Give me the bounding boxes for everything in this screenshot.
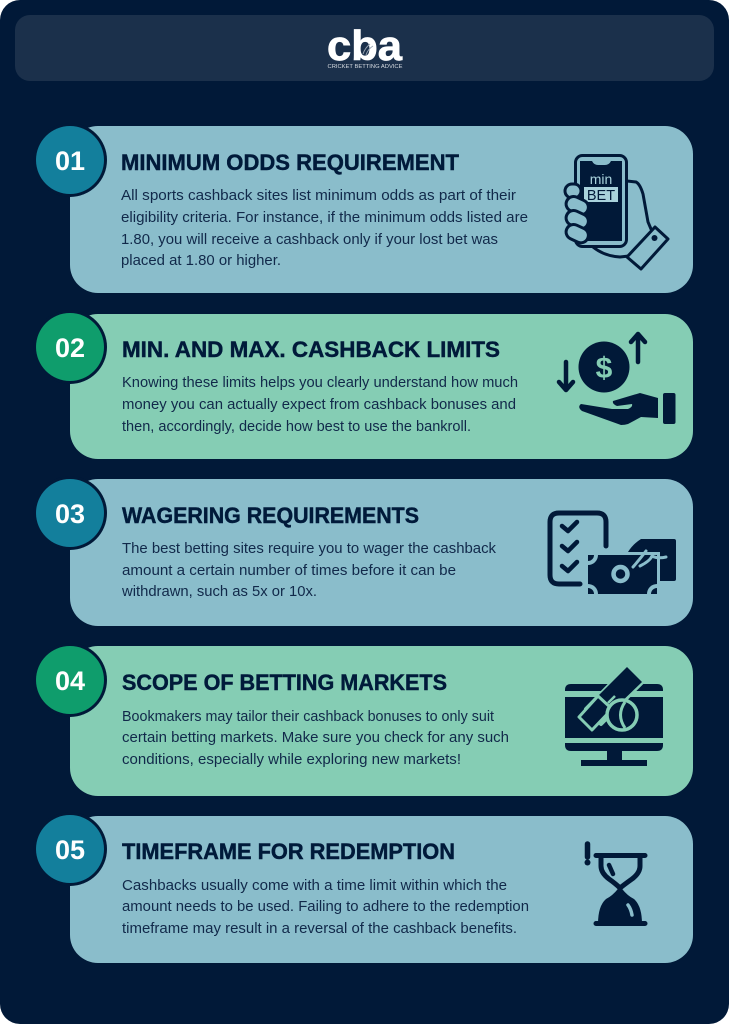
body text 02: then, accordingly, decide how best to use the bankroll. bbox=[122, 419, 471, 435]
panel 5: timeframe for redemption bbox=[33, 812, 693, 963]
number badge 01 bbox=[33, 123, 107, 197]
body text 03 bbox=[121, 541, 497, 600]
body text 05: timeframe may result in a reversal of the cashback benefits. bbox=[122, 921, 517, 937]
logo: cba: cba bbox=[327, 22, 403, 69]
number badge 05: 05 bbox=[55, 835, 85, 865]
icon: hand with coin and arrows bbox=[559, 334, 676, 425]
number badge 03: 03 bbox=[55, 499, 85, 529]
icon: hourglass with exclamation mark bbox=[584, 844, 645, 924]
body text 02 bbox=[122, 375, 518, 435]
icon: hand holding phone with min bet bbox=[564, 156, 668, 269]
body text 05: amount needs to be used. Failing to adhere to the redemption bbox=[122, 899, 529, 915]
body text 04: conditions, especially while exploring new markets! bbox=[122, 752, 461, 768]
body text 02: Knowing these limits helps you clearly understand how much bbox=[122, 375, 518, 391]
body text 04 bbox=[122, 709, 509, 768]
body text 05 bbox=[122, 878, 529, 937]
panel 1: minimum odds requirement bbox=[33, 123, 693, 293]
number badge 03 bbox=[33, 476, 107, 550]
body text 01: placed at 1.80 or higher. bbox=[121, 253, 281, 269]
number badge 04 bbox=[33, 643, 107, 717]
number badge 04: 04 bbox=[55, 666, 85, 696]
icon: hand holding phone with min bet: BET bbox=[587, 188, 615, 204]
icon: monitor with cricket bat and ball bbox=[565, 667, 663, 766]
body text 03: withdrawn, such as 5x or 10x. bbox=[121, 584, 317, 600]
number badge 01: 01 bbox=[55, 146, 85, 176]
body text 05: Cashbacks usually come with a time limit within which the bbox=[122, 878, 507, 894]
body text 04: Bookmakers may tailor their cashback bonuses to only suit bbox=[122, 709, 494, 725]
body text 01: eligibility criteria. For instance, if the minimum odds listed are bbox=[121, 210, 528, 226]
body text 01: All sports cashback sites list minimum odds as part of their bbox=[121, 188, 516, 204]
logo: cba: CRICKET BETTING ADVICE bbox=[328, 64, 403, 70]
number badge 05 bbox=[33, 812, 107, 886]
panel 2: cashback limits bbox=[33, 310, 693, 459]
header band with logo bbox=[15, 15, 714, 81]
heading 03: WAGERING REQUIREMENTS bbox=[122, 503, 419, 528]
body text 03: The best betting sites require you to wager the cashback bbox=[122, 541, 497, 557]
panel 3: wagering requirements bbox=[33, 476, 693, 626]
icon: checklist and banknotes bbox=[550, 513, 676, 606]
number badge 02 bbox=[33, 310, 107, 384]
body text 01 bbox=[121, 188, 528, 269]
heading 02: MIN. AND MAX. CASHBACK LIMITS bbox=[122, 337, 500, 362]
number badge 02: 02 bbox=[55, 333, 85, 363]
body text 03: amount a certain number of times before it can be bbox=[122, 563, 456, 579]
body text 01: 1.80, you will receive a cashback only if your lost bet was bbox=[121, 232, 498, 248]
icon: hand with coin and arrows: $ bbox=[596, 352, 613, 385]
heading 04: SCOPE OF BETTING MARKETS bbox=[122, 670, 447, 695]
icon: hand holding phone with min bet: min bbox=[590, 171, 612, 187]
body text 02: money you can actually expect from cashback bonuses and bbox=[122, 397, 516, 413]
panel 4: scope of betting markets bbox=[33, 643, 693, 796]
heading 01: MINIMUM ODDS REQUIREMENT bbox=[121, 150, 460, 175]
heading 05: TIMEFRAME FOR REDEMPTION bbox=[122, 839, 455, 864]
body text 04: certain betting markets. Make sure you check for any such bbox=[122, 730, 509, 746]
